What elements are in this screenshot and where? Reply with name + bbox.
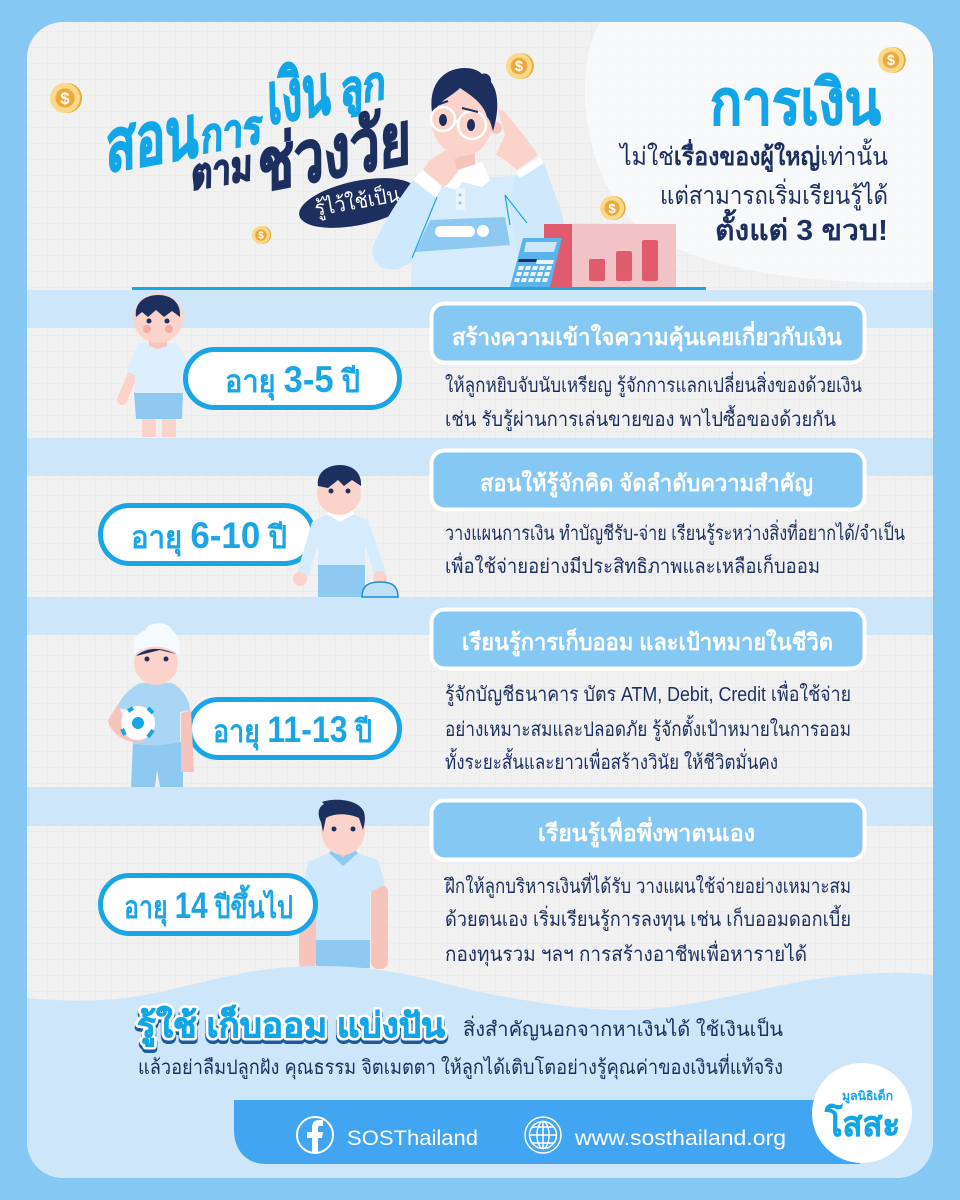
right heading: ไม่ใช่เรื่องของผู้ใหญ่เท่านั้น xyxy=(618,138,888,173)
age pill 14 xyxy=(100,876,316,934)
age pill 6-10 xyxy=(100,506,314,564)
logo xyxy=(812,1063,912,1163)
logo: มูลนิธิเด็ก xyxy=(842,1088,893,1104)
body text 3 xyxy=(445,680,851,774)
illustration: thinking man xyxy=(372,68,568,288)
body text 4: กองทุนรวม ฯลฯ การสร้างอาชีพเพื่อหารายได้ xyxy=(445,940,807,967)
body text 2: เพื่อใช้จ่ายอย่างมีประสิทธิภาพและเหลือเก็บออม xyxy=(445,552,820,578)
body text 3: รู้จักบัญชีธนาคาร บัตร ATM, Debit, Credit เพื่อใช้จ่าย xyxy=(445,680,851,707)
body text 4: ด้วยตนเอง เริ่มเรียนรู้การลงทุน เช่น เก็บออมดอกเบี้ย xyxy=(445,905,851,932)
decorative underline xyxy=(132,287,706,290)
body text 1: เช่น รับรู้ผ่านการเล่นขายของ พาไปซื้อของด้วยกัน xyxy=(445,405,836,432)
title: สอน xyxy=(95,92,203,188)
facebook name: SOSThailand xyxy=(347,1127,478,1150)
right heading xyxy=(618,69,888,247)
icon: coin above chart xyxy=(600,196,626,220)
body text 1: ให้ลูกหยิบจับนับเหรียญ รู้จักการแลกเปลี่ยนสิ่งของด้วยเงิน xyxy=(445,371,862,398)
slogan: รู้ใช้ เก็บออม แบ่งปัน xyxy=(137,1004,445,1047)
section heading 3: เรียนรู้การเก็บออม และเป้าหมายในชีวิต xyxy=(462,627,833,657)
bottom wave panel xyxy=(27,966,933,1178)
section heading 4 xyxy=(432,800,864,860)
title: ช่วงวัย xyxy=(246,99,418,208)
body text 4: ฝึกให้ลูกบริหารเงินที่ได้รับ วางแผนใช้จ่ายอย่างเหมาะสม xyxy=(444,872,851,899)
body text 3: ทั้งระยะสั้นและยาวเพื่อสร้างวินัย ให้ชีวิตมั่นคง xyxy=(445,748,778,774)
section heading 1 xyxy=(432,304,864,362)
logo: โสสะ xyxy=(824,1103,900,1144)
illustration: teen 14+ xyxy=(299,800,388,969)
title: ลูก xyxy=(333,56,390,119)
illustration: child 11-13 xyxy=(108,623,194,787)
section heading 2 xyxy=(432,450,864,510)
section heading 1: สร้างความเข้าใจความคุ้นเคยเกี่ยวกับเงิน xyxy=(452,320,842,352)
age pill 3-5 xyxy=(186,350,400,408)
slogan: รู้ใช้ เก็บออม แบ่งปัน xyxy=(137,1004,445,1047)
icon: coin top right xyxy=(878,47,906,73)
age pill 11-13: อายุ 11-13 ปี xyxy=(213,709,372,751)
closing text: สิ่งสำคัญนอกจากหาเงินได้ ใช้เงินเป็น xyxy=(463,1015,783,1041)
body text 2 xyxy=(445,519,905,578)
title: ตาม xyxy=(184,141,256,199)
age pill 11-13 xyxy=(190,700,400,758)
section heading 3 xyxy=(432,610,864,668)
age pill 6-10: อายุ 6-10 ปี xyxy=(131,515,287,557)
section heading 4: เรียนรู้เพื่อพึ่งพาตนเอง xyxy=(538,816,755,848)
illustration: child 6-10 xyxy=(293,465,398,597)
icon: coin small xyxy=(252,226,271,244)
closing text xyxy=(138,1015,783,1080)
title: การ xyxy=(194,100,269,163)
right heading: แต่สามารถเริ่มเรียนรู้ได้ xyxy=(660,178,888,211)
slogan: รู้ใช้ เก็บออม แบ่งปัน xyxy=(137,1007,445,1050)
icon: coin top middle xyxy=(506,53,534,79)
website: www.sosthailand.org xyxy=(574,1127,786,1150)
title: เงิน xyxy=(257,51,335,139)
illustration: child 3-5 xyxy=(122,293,187,437)
illustration: bar chart box xyxy=(544,224,676,288)
age pill 14: อายุ 14 ปีขึ้นไป xyxy=(124,884,293,927)
badge: know how to use xyxy=(295,169,421,237)
title xyxy=(95,51,418,208)
right heading: ตั้งแต่ 3 ขวบ! xyxy=(715,208,888,247)
icon: globe xyxy=(525,1117,561,1153)
right heading: การเงิน xyxy=(710,69,881,138)
section heading 2: สอนให้รู้จักคิด จัดลำดับความสำคัญ xyxy=(480,469,813,498)
body text 3: อย่างเหมาะสมและปลอดภัย รู้จักตั้งเป้าหมายในการออม xyxy=(445,715,851,742)
icon: coin left xyxy=(50,83,82,113)
footer bar xyxy=(234,1100,860,1164)
icon: facebook xyxy=(297,1117,333,1153)
closing text: แล้วอย่าลืมปลูกฝัง คุณธรรม จิตเมตตา ให้ลูกได้เติบโตอย่างรู้คุณค่าของเงินที่แท้จริง xyxy=(138,1053,783,1080)
illustration: calculator xyxy=(510,238,562,287)
body text 1 xyxy=(445,371,862,432)
body text 4 xyxy=(444,872,851,967)
badge: know how to use: รู้ไว้ใช้เป็น xyxy=(312,180,402,222)
age pill 3-5: อายุ 3-5 ปี xyxy=(225,359,360,401)
